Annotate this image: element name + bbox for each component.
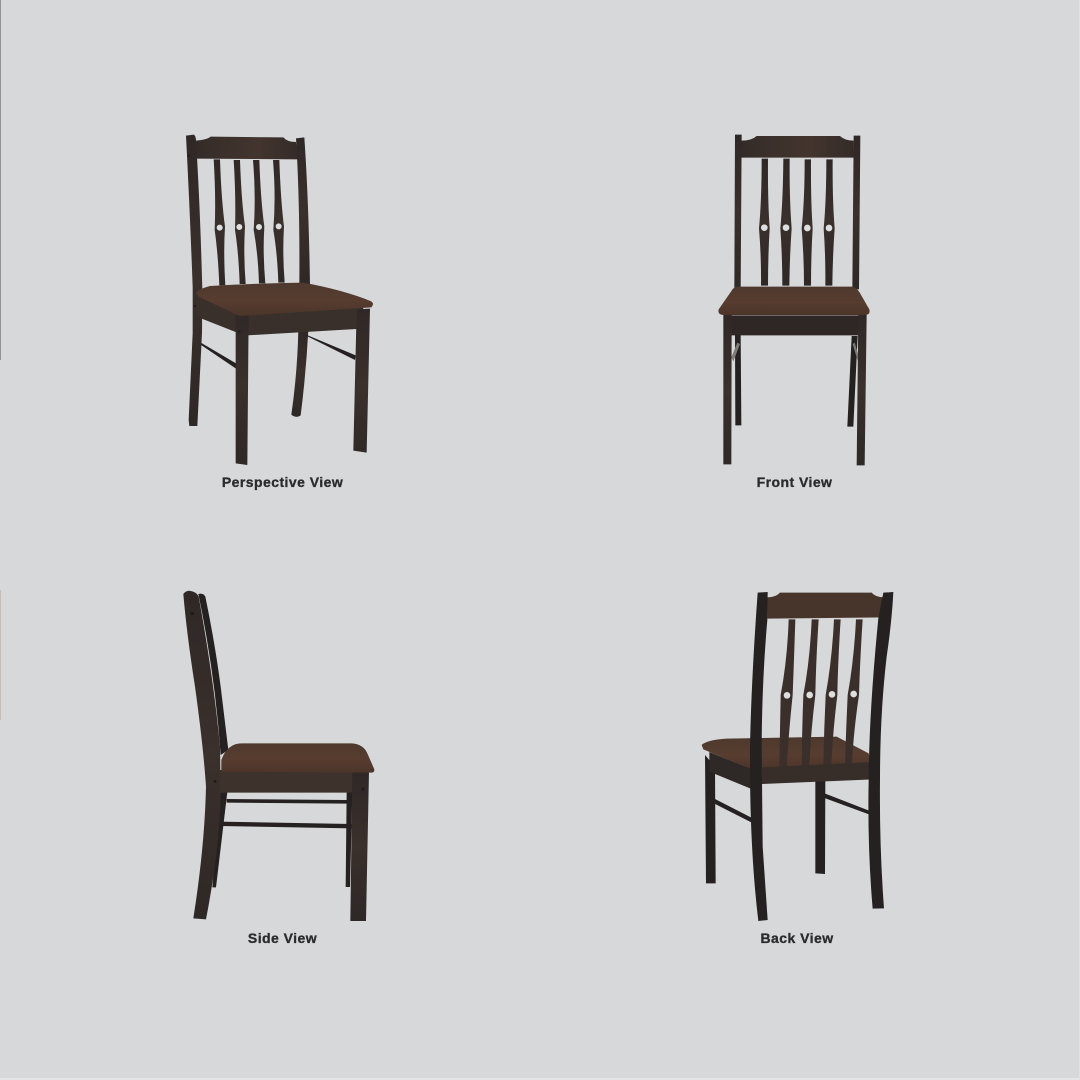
far legs [705,755,825,883]
chair: back view [702,592,893,921]
front legs [723,314,867,465]
rear post edge [198,594,228,755]
apron [731,315,859,335]
label: front view: Front View [757,474,832,490]
left post and leg [750,592,768,921]
top rail [195,137,299,159]
right post and leg [868,592,893,909]
back legs [735,335,858,427]
label: side view: Side View [248,930,317,946]
slat holes [761,224,832,231]
seat [718,287,870,315]
slats [759,159,835,286]
bolts [191,612,364,790]
slats [779,619,863,767]
chair: front view [718,135,870,465]
slats [214,159,225,285]
slat holes [217,223,282,231]
seat [702,737,872,770]
stretchers [710,793,869,822]
chair: side view [183,591,374,921]
back left post and leg [186,135,202,426]
chair: perspective view [186,135,373,465]
label: perspective view: Perspective View [222,474,343,490]
bolts [188,155,240,333]
back right leg [291,330,308,417]
far back leg [212,792,227,887]
seat [196,283,373,316]
label: back view: Back View [760,930,834,946]
back posts [734,135,860,289]
stretchers [220,799,352,828]
side stretchers [197,335,356,369]
rear apron [762,762,873,784]
front legs [236,309,370,465]
side apron [709,752,751,789]
far front leg [346,792,352,887]
metal braces [731,343,859,361]
back right post [296,137,310,285]
front apron [247,303,363,335]
near front leg [350,772,369,921]
top rail [741,136,854,158]
slat holes [784,691,857,699]
side apron [197,292,241,334]
top rail [767,593,885,619]
near back post and leg [183,591,221,919]
apron [220,770,353,793]
seat [221,743,374,773]
